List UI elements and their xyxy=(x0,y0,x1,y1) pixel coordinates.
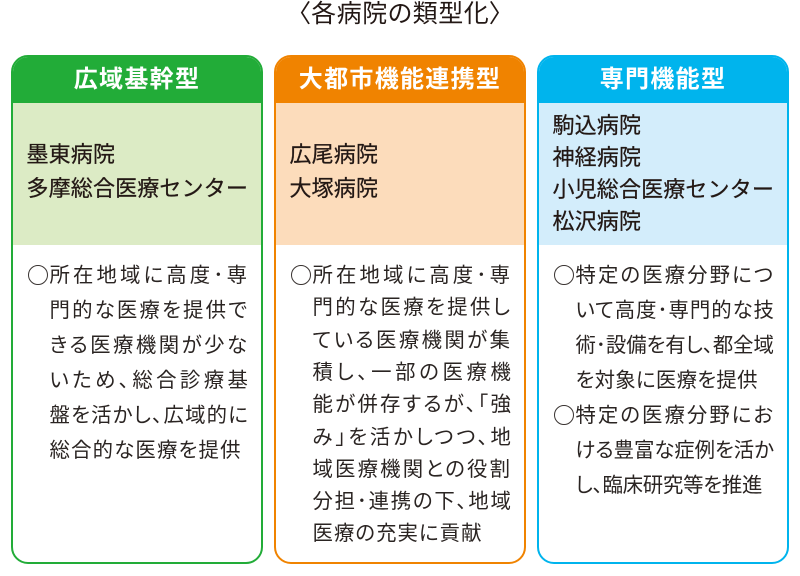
panel: 専門機能型 xyxy=(537,55,789,564)
description: 特定の医療分野につ xyxy=(576,265,773,287)
description: 門的な医療を提供で xyxy=(50,300,247,322)
description: を対象に医療を提供 xyxy=(576,370,758,392)
description: し、臨床研究等を推進 xyxy=(576,475,762,497)
panel heading: 専門機能型 xyxy=(600,66,726,93)
description: ている医療機関が集 xyxy=(312,330,510,352)
panel: 大都市機能連携型 xyxy=(274,55,526,564)
hospital names xyxy=(26,142,248,201)
description: 医療の充実に貢献 xyxy=(312,523,482,545)
description xyxy=(291,264,510,545)
description: 分担･連携の下、地域 xyxy=(312,491,510,513)
hospital list background xyxy=(539,102,787,245)
hospital names: 駒込病院 xyxy=(552,113,641,138)
description: 総合的な医療を提供 xyxy=(50,440,240,462)
hospital names: 神経病院 xyxy=(552,145,641,170)
description: 所在地域に高度･専 xyxy=(312,265,510,287)
panel heading xyxy=(11,55,263,102)
panel: 広域基幹型 xyxy=(11,55,263,564)
panel heading xyxy=(274,55,526,102)
hospital names xyxy=(552,113,774,234)
hospital names: 松沢病院 xyxy=(552,209,641,234)
hospital names: 墨東病院 xyxy=(26,142,115,167)
panel heading: 広域基幹型 xyxy=(74,66,200,93)
description: 所在地域に高度･専 xyxy=(50,265,247,287)
description: み｣を活かしつつ、地 xyxy=(312,427,510,449)
description: 術･設備を有し、都全域 xyxy=(576,335,773,357)
hospital list background xyxy=(276,102,524,245)
description: ける豊富な症例を活か xyxy=(576,440,773,462)
description: 門的な医療を提供し xyxy=(312,297,510,319)
description: 域医療機関との役割 xyxy=(312,459,510,481)
hospital names: 広尾病院 xyxy=(290,142,378,167)
description: いて高度･専門的な技 xyxy=(576,300,773,322)
description: いため、総合診療基 xyxy=(50,370,247,392)
description: 積し、一部の医療機 xyxy=(312,362,510,384)
hospital names: 多摩総合医療センター xyxy=(26,176,248,201)
title: 〈各病院の類型化〉 xyxy=(298,0,503,28)
panel heading: 大都市機能連携型 xyxy=(299,66,501,93)
description xyxy=(28,264,248,462)
description: 盤を活かし、広域的に xyxy=(50,405,247,427)
hospital list background xyxy=(13,102,261,245)
hospital names xyxy=(290,142,378,201)
description xyxy=(554,264,774,497)
panel heading xyxy=(537,55,789,102)
hospital names: 小児総合医療センター xyxy=(552,177,774,202)
description: きる医療機関が少な xyxy=(50,335,247,357)
description: 能が併存するが、｢強 xyxy=(312,394,510,416)
hospital names: 大塚病院 xyxy=(290,176,378,201)
description: 特定の医療分野にお xyxy=(576,405,773,427)
